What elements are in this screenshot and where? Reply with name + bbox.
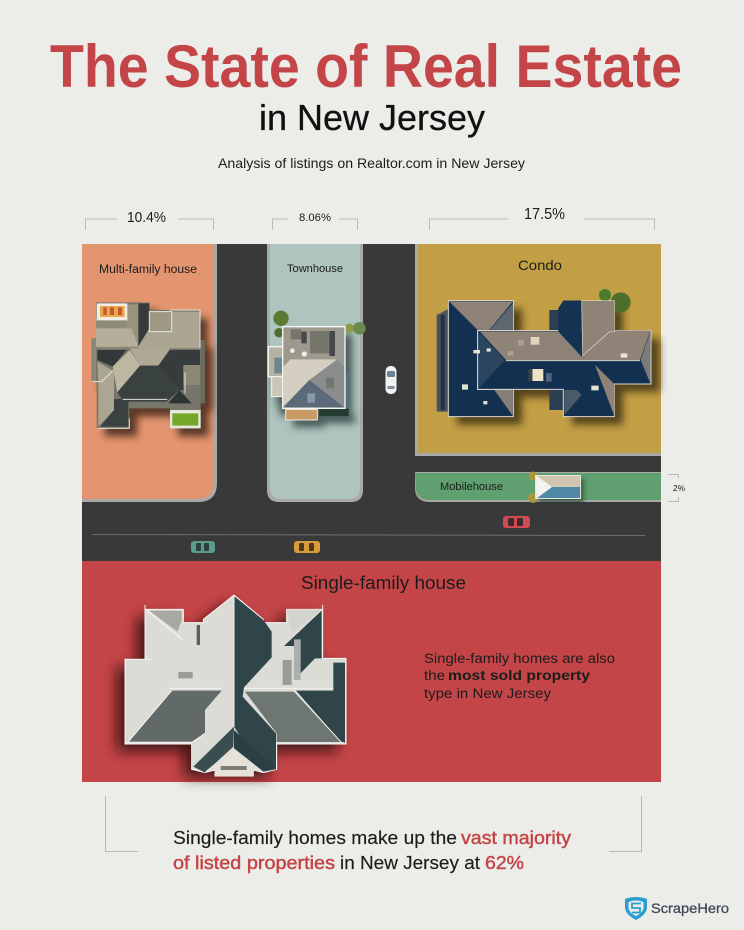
bracket: summary: [106, 796, 642, 852]
callout: most sold property: type in New Jersey: [424, 686, 551, 701]
bracket: townhouse share 8.06%: 8.06%: [299, 212, 331, 224]
summary text: of listed properties: [173, 852, 335, 873]
bracket: condo share 17.5%: 17.5%: [524, 206, 565, 223]
logo: ScrapeHero: [625, 897, 729, 920]
panel: single-family house: [82, 561, 661, 782]
car: yellow: [294, 541, 320, 553]
car: red: [503, 516, 530, 528]
bracket: condo share 17.5%: [430, 206, 654, 230]
car: teal: [191, 541, 215, 553]
road centre line: [92, 534, 645, 536]
car: white: [386, 366, 396, 394]
heading: single-family house: Single-family house: [301, 573, 466, 593]
bracket: multi-family share 10.4%: [86, 209, 214, 230]
panel: multi-family house: [82, 244, 217, 502]
bracket: mobilehouse share 2%: 2%: [673, 483, 685, 493]
title: in New Jersey: [259, 97, 485, 138]
icon: townhouse roof: [268, 311, 366, 427]
icon: condo roof: [437, 289, 660, 425]
bracket: townhouse share 8.06%: [272, 212, 358, 230]
subtitle: Analysis of listings on Realtor.com in New Jersey: [218, 155, 525, 171]
label: multi-family house: Multi-family house: [99, 264, 197, 276]
icon: mobilehouse roof: [528, 472, 584, 504]
title: The State of Real Estate: [50, 33, 682, 100]
icon: single-family roof: [117, 595, 346, 777]
bracket: mobilehouse share 2%: [668, 474, 685, 502]
summary text: in New Jersey at: [340, 852, 480, 873]
road network: [82, 244, 661, 562]
logo: ScrapeHero: ScrapeHero: [651, 900, 729, 916]
summary text: 62%: [485, 852, 524, 873]
summary text: vast majority: [461, 827, 572, 848]
panel: condo: [415, 244, 661, 456]
label: condo: Condo: [518, 257, 562, 273]
label: townhouse: Townhouse: [287, 263, 343, 275]
panel: townhouse: [267, 244, 366, 502]
label: mobilehouse: Mobilehouse: [440, 481, 503, 493]
callout: most sold property: the: [424, 668, 445, 683]
summary text: Single-family homes make up the: [173, 827, 457, 848]
title: [50, 33, 682, 138]
callout: most sold property: Single-family homes are also: [424, 651, 615, 666]
icon: multi-family roof: [92, 302, 213, 436]
panel: mobilehouse: [415, 472, 661, 504]
bracket: multi-family share 10.4%: 10.4%: [127, 209, 166, 226]
callout: most sold property: most sold property: [448, 668, 591, 683]
